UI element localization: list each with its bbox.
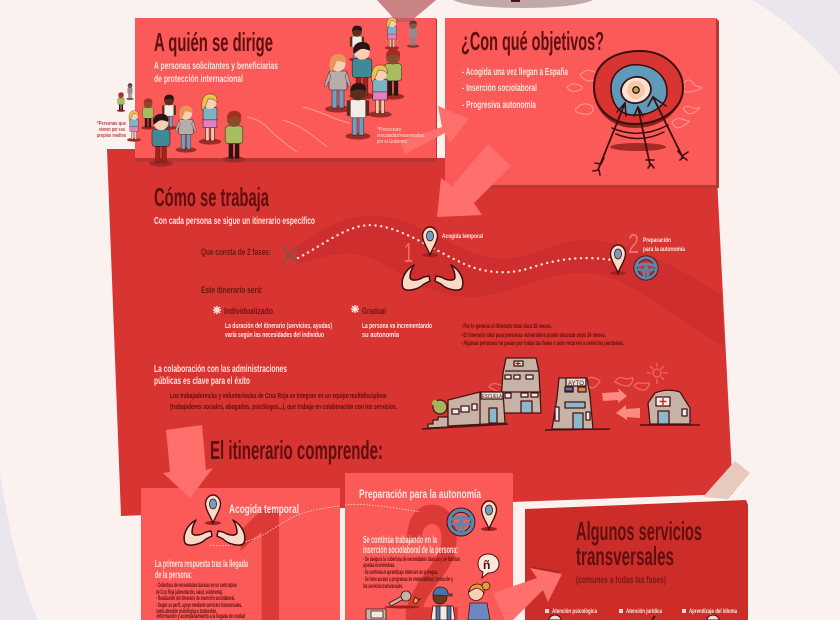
text: inserción (363, 535, 460, 590)
item: individualizado (213, 306, 332, 339)
icon: pin (481, 501, 497, 531)
top shadow ellipse (453, 0, 593, 8)
service: aprendizaje del idioma: Aprendizaje del idioma (689, 608, 737, 615)
service: atención psicológica (545, 608, 597, 620)
heading: transversales (576, 541, 674, 571)
label: este itinerario: Este itinerario será: (201, 285, 263, 296)
text: primera respuesta: - Según su perfil, apoyo mediante servicios transversales, (156, 603, 242, 609)
label: preparación: para la autonomía (643, 246, 685, 253)
service: aprendizaje del idioma (682, 608, 737, 620)
dotted itinerary route (298, 225, 612, 272)
icon: pin fase 1 (422, 227, 438, 257)
icon: steering wheel (636, 258, 656, 278)
people: right group (324, 18, 419, 140)
text: primera respuesta: de Cruz Roja (alimentación, salud, vestimenta). (156, 590, 223, 596)
background shape: lavender top right (752, 0, 840, 75)
decorative itinerary band (296, 216, 724, 346)
notes: duración (461, 324, 624, 347)
icon: keys (384, 591, 421, 608)
text: inserción: - Se continúa el aprendizaje intensivo de la lengua. (363, 570, 438, 576)
text: primera respuesta: - Realización del itinerario de inserción sociolaboral. (156, 596, 235, 602)
footnote left (97, 121, 126, 139)
icon: pin fase 2 (610, 245, 626, 275)
list of objectives (462, 67, 568, 111)
title: Acogida temporal (229, 502, 299, 516)
text: primera respuesta: La primera respuesta tras la llegada (155, 559, 248, 570)
icon: start cross (283, 248, 297, 262)
icon: speech bubble ñ (478, 554, 499, 578)
subtitle: Con cada persona se sigue un itinerario específico (154, 216, 315, 227)
subtitle: A personas solicitantes y beneficiarias (154, 61, 278, 72)
item: gradual: su autonomía (362, 330, 400, 339)
panel: acogida temporal (141, 488, 340, 620)
subtitle: de protección internacional (154, 74, 243, 85)
text: inserción: ayudas económicas. (363, 563, 395, 569)
text: primera respuesta (155, 559, 248, 620)
arrow: hacia centro de salud (602, 388, 627, 403)
text: inserción: los servicios transversales. (363, 584, 403, 590)
icon: steering wheel (449, 510, 473, 534)
subtitle: (comunes a todas las fases) (576, 574, 666, 586)
list of objectives: - Inserción sociolaboral (462, 83, 537, 94)
panel: servicios transversales (525, 500, 748, 620)
item: gradual: La persona va incrementando (362, 321, 432, 330)
icon: hands (184, 520, 245, 545)
service: atención jurídica: Atención jurídica (626, 608, 662, 615)
panel: a quién se dirige (135, 18, 437, 162)
text: inserción: inserción sociolaboral de la persona: (363, 545, 458, 556)
notes: duración: - Por lo general el itinerario total dura 18 meses. (461, 324, 552, 330)
list of objectives: - Acogida una vez llegan a España (462, 67, 568, 78)
heading: ¿Con qué objetivos? (461, 26, 604, 56)
arrow: objetivos a cómo se trabaja (437, 144, 511, 217)
text: colaboración: La colaboración con las administraciones (154, 364, 287, 375)
subtitle (154, 61, 278, 85)
panel: con qué objetivos (445, 18, 719, 188)
footnote right: rescatadas/reasentadas (377, 133, 424, 139)
text: inserción: Se continúa trabajando en la (363, 535, 437, 546)
text: primera respuesta: de la persona: (155, 570, 192, 581)
text: colaboración: (trabajadores sociales, abogados, psicólogos...), que trabaja en colaboración con los servicios. (170, 402, 397, 411)
footnote right (377, 127, 424, 145)
label: preparación (643, 237, 685, 253)
phase number 2: 2 (628, 228, 639, 259)
heading: itinerario comprende: El itinerario comprende: (210, 435, 383, 465)
footnote left: *Personas que (97, 121, 126, 127)
item: individualizado: La duración del itinerario (servicios, ayudas) (225, 321, 332, 330)
icon: hands (402, 265, 463, 290)
list of objectives: - Progresiva autonomía (462, 100, 536, 111)
heading: Algunos servicios (576, 516, 702, 546)
heading: A quién se dirige (154, 27, 273, 57)
decorative beige arrow bottom right (703, 461, 750, 499)
text: colaboración: públicas es clave para el éxito (154, 376, 250, 387)
item: individualizado: Individualizado (224, 306, 273, 317)
service: atención psicológica: Atención psicológica (552, 608, 597, 615)
heading (576, 516, 702, 571)
icon: office machine (366, 609, 386, 620)
footnote right: por el Gobierno (377, 139, 407, 145)
illustration: buildings: AYTO (568, 380, 584, 387)
icon: pin (205, 495, 221, 525)
notes: duración: - Algunas personas no pasan por todas las fases o solo recurren a servicios puntuales. (461, 341, 624, 347)
people: left group (117, 83, 245, 167)
text: inserción: - Se tiene acceso a programas de empleabilidad, formación y (363, 577, 453, 583)
arrow: hacia fases (163, 425, 213, 498)
text: colaboración: Los trabajadores/as y voluntarios/as de Cruz Roja se integran en un equipo multidisciplinar (170, 391, 387, 400)
service: atención jurídica (619, 608, 662, 620)
arrow: a quién a objetivos (400, 106, 469, 154)
footnote left: vienen por sus (99, 127, 125, 133)
text: primera respuesta: como atención psicológica o traducción. (156, 609, 217, 615)
icon: woman (468, 582, 490, 620)
text: primera respuesta: -Información y acompañamiento a la llegada de ciudad (156, 614, 245, 620)
panel: preparación para la autonomía (345, 473, 513, 620)
icon: target with arrows (567, 51, 702, 175)
label: dos fases: Que consta de 2 fases: (201, 247, 271, 258)
phase number 1: 1 (404, 237, 413, 268)
illustration: buildings (422, 358, 700, 430)
footnote right: *Personas (377, 127, 401, 133)
heading: cómo se trabaja: Cómo se trabaja (154, 182, 269, 212)
notes: duración: - El itinerario total para personas vulnerables puede alcanzar unos 24 meses. (461, 333, 606, 339)
label: preparación: Preparación (643, 237, 671, 244)
title: Preparación para la autonomía (359, 487, 481, 501)
label: acogida temporal: Acogida temporal (442, 233, 483, 240)
text: primera respuesta: - Cobertura de necesidades básicas en un centro/piso (156, 583, 237, 589)
dotted route (345, 504, 420, 512)
background shape: lavender bottom left (0, 473, 38, 620)
dotted route (210, 506, 340, 546)
arrow: hacia ayuntamiento (616, 405, 640, 420)
footnote left: propios medios (97, 133, 126, 139)
item: gradual (351, 305, 432, 339)
item: gradual: Gradual (362, 306, 386, 317)
text: colaboración (154, 364, 397, 411)
item: individualizado: varía según las necesidades del individuo (225, 330, 324, 339)
text: inserción: - Se asegura la cobertura de necesidades básicas y se facilitan (363, 557, 460, 563)
icon: worker (431, 587, 455, 620)
illustration: buildings: ESCUELA (482, 394, 503, 400)
arrow: hacia servicios (493, 566, 562, 620)
arrow: top entry (377, 0, 436, 22)
icon: speech bubble ñ: ñ (483, 558, 490, 572)
panel: cómo se trabaja (107, 149, 733, 516)
